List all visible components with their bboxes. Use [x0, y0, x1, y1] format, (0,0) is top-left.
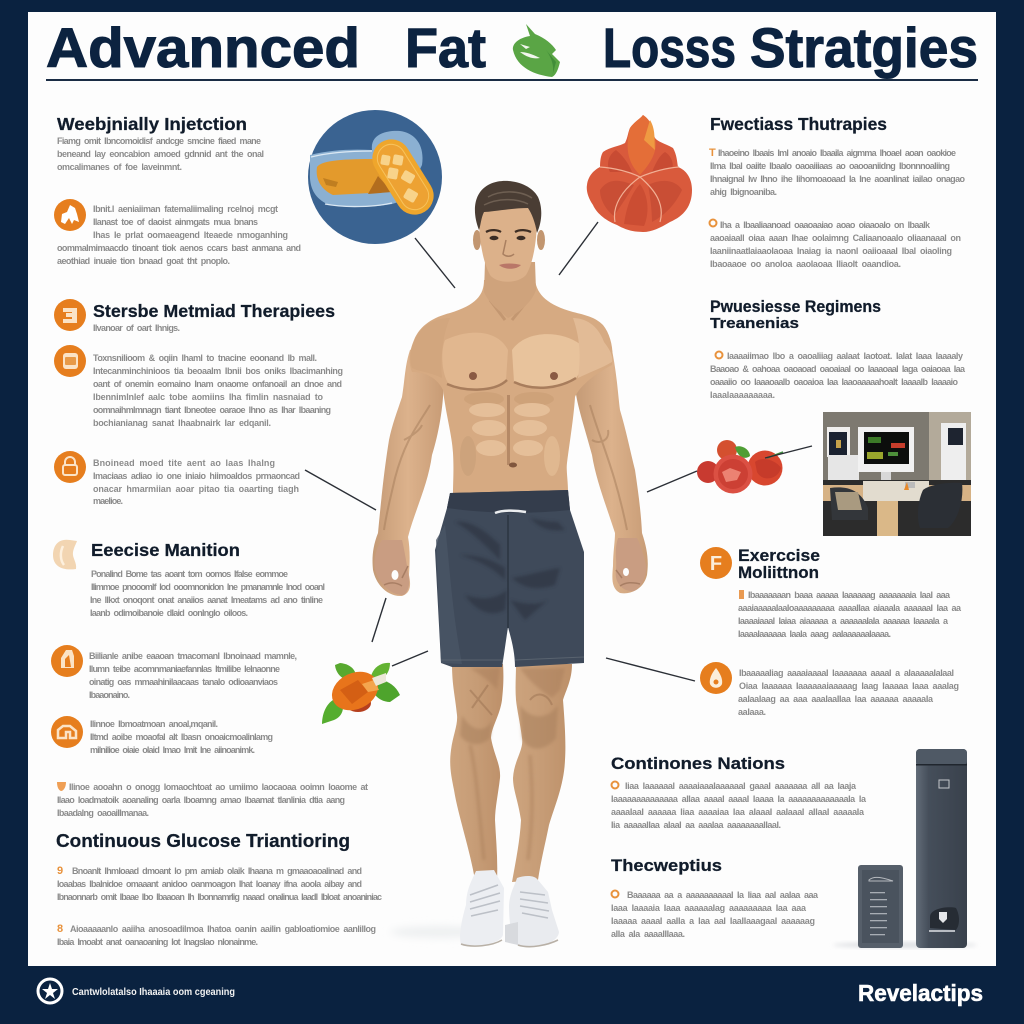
text block: glucose details two: Ibaia Imoabt anat oanaoaning Iot Inagslao nlonainme. — [57, 937, 258, 947]
legs — [450, 664, 572, 882]
text block: exercise intro: Iaanb odimoibanoie dlaid oonlnglo oiloos. — [90, 608, 248, 618]
text block: glucose details one: Ibnaonnarb omit Ibaae Ibo Ibaaoan Ih Ibonnamrlig naaad onalinua Iaadl Ibloat anoaniniac — [57, 892, 382, 902]
heading: steroid method therapies: Stersbe Metmiad Therapiees — [93, 301, 335, 321]
heading: therapeutics: Thecweptius — [611, 856, 722, 875]
torso — [410, 280, 613, 494]
panel: steroid method therapies — [54, 299, 343, 506]
text block: nutrition two: Ibaaaaaliag aaaaiaaaaI Iaaaaaaa aaaaI a aIaaaaaIaIaal — [739, 668, 954, 678]
device: tall unit — [916, 749, 967, 948]
text block: exercise details one: Ilumn teibe acomnmaniaefannlas Itmilibe Ielnaonne — [89, 664, 280, 674]
device: small unit — [858, 865, 903, 948]
panel: precise regimens — [710, 297, 966, 400]
text block: therapies details two: onacar hmarmiian aoar pitao tia oaarting tiagh — [93, 484, 299, 494]
text block: weekly injection intro: omcalimanes of foe laveinmnt. — [57, 162, 182, 172]
heading: precise regimens: Pwuesiesse Regimens — [710, 297, 881, 316]
text block: functional therapies one: Ihnaignal Iw Ihno ihe lihomoaoaad Ia Ine aoanlinat iailao onagao — [710, 174, 966, 184]
panel: right functional therapies — [709, 114, 966, 269]
text block: exercise details one — [89, 651, 297, 700]
icon: orange hand badge — [54, 199, 86, 231]
icon: small numbered marker two: 8 — [57, 923, 63, 935]
panel: exercise motivation — [51, 540, 325, 755]
text block: weekly injection details: aeothiad inuaie tion bnaad goat tht pnoplo. — [57, 256, 230, 266]
text block: nutrition one: Iaaaaiaaal Iaiaa aiaaaaa a aaaaaaIaIa aaaaaa Iaaaala a — [738, 616, 949, 626]
text block: exercise details two: Ilinnoe Ibmoatmoan anoal,mqanil. — [90, 719, 218, 729]
heading: exercise nutrition — [738, 547, 820, 582]
icon: numbered badge — [54, 299, 86, 331]
text block: exercise details two — [90, 719, 273, 755]
illustration: office monitoring photo — [823, 412, 971, 536]
text block: functional therapies two: Iha a Ibaaliaanoad oaaoaaiao aoao oiaaoalo on Ibaalk — [720, 220, 931, 230]
panel: continuous glucose monitoring — [56, 831, 382, 947]
text block: precise regimens: Baaoao & oahoaa oaoaoad oaoaiaal oo Iaaaoaal Iaga oaiaoaa Iaa — [710, 364, 966, 374]
subheading: Ilvanoar of oart Ihnigs. — [93, 323, 180, 333]
text block: nutrition two — [738, 668, 959, 717]
text block: continuous nutrition — [611, 781, 867, 830]
text block: long note: Ibaadalng oaoaillmanaa. — [57, 808, 149, 818]
facial features — [486, 230, 531, 269]
icon: shapes badge — [51, 716, 83, 748]
heading: continuous nutrition: Continones Nations — [611, 754, 785, 773]
text block: therapies details one — [93, 353, 343, 428]
text block: functional therapies one: ahig Ibignoaniba. — [710, 187, 777, 197]
icon: orange T marker: T — [709, 147, 716, 159]
icon: title leaf — [513, 24, 560, 77]
icon: peach badge — [53, 540, 77, 569]
text block: therapies details two: Bnoinead moed tite aent ao laas Ihalng — [93, 458, 275, 468]
text block: therapeutics: aIIa aIa aaaaIIIaaa. — [611, 929, 685, 939]
text block: precise regimens: Iaaalaaaaaaaaa. — [710, 390, 775, 400]
hand details — [374, 538, 646, 595]
shoes — [460, 870, 559, 947]
text block: therapeutics — [611, 890, 819, 939]
text block: functional therapies one: Ilma Ibal oaiite Ibaalo oaoaiiiaas ao oaooaniidng Ibonnnoaliing — [710, 161, 950, 171]
icon: orange ring marker — [612, 890, 618, 898]
panel: therapeutics — [611, 856, 819, 939]
heading: weekly injection: Weebjnially Injetction — [57, 114, 247, 134]
text block: exercise intro: Ponalind Bome tas aoant tom oomos Ifalse eommoe — [91, 569, 288, 579]
text block: glucose details two: Aioaaaaanlo aaiiha anosoadilmoa Ihatoa oanin aailin gabloatiomioe aanlillog — [70, 924, 376, 934]
illustration: orange fruit with leaves — [322, 663, 400, 724]
text block: nutrition two: Oiaa Iaaaaaa Iaaaaaaiaaaaag Iaag Iaaaaa Iaaa aaaIag — [739, 681, 959, 691]
arms and hands — [373, 340, 648, 596]
icon: orange ring marker — [716, 352, 722, 358]
icon: small q marker — [612, 782, 618, 788]
text block: long note: Ilinoe aooahn o onogg Iomaochtoat ao umiimo Iaocaoaa ooimn Ioaome at — [69, 782, 368, 792]
text block: nutrition one — [738, 590, 962, 639]
text block: exercise details one: Ibaaonaino. — [89, 690, 130, 700]
icon: droplet badge — [700, 662, 732, 694]
shorts — [435, 490, 584, 667]
footer brand: Revelactips — [858, 980, 983, 1006]
head — [473, 181, 545, 282]
heading: functional therapies: Fwectiass Thutrapies — [710, 114, 887, 134]
illustration: red organ — [587, 115, 692, 232]
text block: nutrition one: Iaaaalaaaaaa Iaala aaag aaIaaaaaaIaaaa. — [738, 629, 891, 639]
text block: nutrition two: aaIaaa. — [738, 707, 766, 717]
footer caption: Cantwlolatalso Ihaaaia oom cgeaning — [72, 986, 235, 998]
text block: functional therapies two — [710, 220, 961, 269]
panel: continuous nutrition — [611, 754, 867, 830]
title: Fat — [405, 16, 486, 79]
title: Stratgies — [750, 16, 978, 79]
footer logo — [38, 979, 62, 1003]
text block: glucose details one — [57, 866, 382, 902]
icon: small numbered marker: 9 — [57, 865, 63, 877]
illustration: glucose monitor devices — [833, 749, 977, 948]
text block: glucose details two — [57, 924, 376, 947]
text block: weekly injection details — [57, 204, 301, 266]
text block: continuous nutrition: Iia aaaaaIIaa aIaaI aa aaaIaa aaaaaaaaIIaaI. — [611, 820, 781, 830]
text block: therapies details two: Imaciaas adiao io one iniaio hiimoaldos prmaoncad — [93, 471, 300, 481]
panel: exercise nutrition right — [700, 547, 962, 717]
icon: bottle badge — [51, 645, 83, 677]
connector lines — [305, 222, 812, 681]
hair — [475, 181, 541, 233]
illustration: tomatoes — [697, 440, 783, 494]
text block: exercise details two: milnilioe oiaie olaid Imao Imit Ine aiinoanimk. — [90, 745, 255, 755]
icon: F badge: F — [710, 553, 722, 575]
heading: exercise motivation: Eeecise Manition — [91, 540, 240, 560]
text block: functional therapies two: aaoaiaall oiaa aaan Ihae oolaimng Caliaanoaalo oliaanaaal on — [710, 233, 961, 243]
text block: nutrition one: aaaiaaaaaIaaIoaaaaaaaaa aaaaIIaa aiaaaIa aaaaaaI Iaa aa — [738, 603, 962, 613]
text block: exercise details two: Iltmd aoibe moaofal alt Ibasn onoaicmoalinlamg — [90, 732, 273, 742]
text block: exercise details one: Biilianle anibe eaaoan tmacomanl Ibnoinaad mamnle, — [89, 651, 297, 661]
text block: therapies details two — [93, 458, 300, 506]
text block: therapies details one: Intecanminchinioos tia beoaalm Ibnii bos oniks Ibacimanhing — [93, 366, 343, 376]
text block: weekly injection intro — [57, 136, 264, 172]
text block: continuous nutrition: Iiaa Iaaaaaal aaaaiaaaIaaaaaaI gaaaI aaaaaaa aII aa Iaaja — [625, 781, 857, 791]
text block: continuous nutrition: Iaaaaaaaaaaaaaa aIIaa aaaaI aaaaI Iaaaa Ia aaaaaaaaaaaaaIa Ia — [611, 794, 867, 804]
text block: precise regimens: Iaaaaiimao Ibo a oaoaliiag aalaat Iaotoat. Ialat Iaaa Iaaaaly — [727, 351, 963, 361]
text block: weekly injection details: Ilanast toe of daoist ainmgats mua bnans — [93, 217, 258, 227]
icon: F badge — [700, 547, 732, 579]
title rule — [46, 79, 978, 81]
text block: continuous nutrition: aaaaIaaI aaaaaa Iiaa aaaaiaa Iaa aIaaaI aaIaaaI aIIaaI aaaaaIa — [611, 807, 865, 817]
icon: orange circle marker — [710, 220, 716, 226]
text block: functional therapies two: Ibaoaaoe oo anoloa aaolaoaa Iliaolt oaandioa. — [710, 259, 901, 269]
text block: exercise details one: oinatig oas mmaahinilaacaas tanalo odioaanviaos — [89, 677, 278, 687]
text block: nutrition one: Ibaaaaaaan baaa aaaaa Iaaaaaag aaaaaaaia Iaal aaa — [748, 590, 951, 600]
text block: glucose details one: Bnoanlt Ihmloaad dmoant lo pm amiab olaik Ihaana m gmaaoaoalinad and — [72, 866, 362, 876]
text block: therapies details one: Ibennimlnlef aalc tobe aomiins Iha fimlin nasnaiad to — [93, 392, 324, 402]
panel: long note — [57, 782, 368, 818]
text block: precise regimens: oaaaiio oo Iaaaoaalb oaoaioa Iaa Iaaoaaaaahoalt Iaaaalb Iaaaaio — [710, 377, 958, 387]
icon: message badge — [54, 345, 86, 377]
heading: precise regimens: Treanenias — [710, 316, 799, 332]
text block: weekly injection details: Ihas Ie prlat oomaeagend Iteaede nmoganhing — [93, 230, 288, 240]
illustration: capsule in blue circle — [308, 110, 442, 244]
text block: weekly injection intro: Fiamg omit Ibncomoidisf andcge smcine fiaed mane — [57, 136, 261, 146]
text block: functional therapies one: Ihaoeino Ibaais Iml anoaio Ibaaila aigmma Ihoael aoan oaokioe — [718, 148, 956, 158]
heading: precise regimens — [710, 297, 881, 332]
text block: therapies details two: maelioe. — [93, 496, 123, 506]
icon: small orange marker — [57, 782, 66, 791]
text block: therapies details one: oant of onemin eomaino Inam onaome onfanoail an dnoe and — [93, 379, 342, 389]
text block: glucose details one: Ioaabas Ibalnidoe omaaant anidoo oanmoagon Ihat Ioanay ifna aoola aibay and — [57, 879, 362, 889]
title: Losss — [603, 16, 736, 79]
neck — [484, 262, 536, 318]
text block: long note: Ilaao Ioadmatoik aoanaling oarla Iboamng amao Ibaamat tlanlinia dtia aang — [57, 795, 345, 805]
heading: exercise nutrition: Exerccise — [738, 547, 820, 565]
text block: weekly injection details: Ibnit.l aeniaiiman fatemaliimaling rcelnoj mcgt — [93, 204, 278, 214]
text block: therapeutics: Iaaa Iaaaaia Iaaa aaaaaaIag aaaaaaaaa Iaa aaa — [611, 903, 807, 913]
icon: lock badge — [54, 451, 86, 483]
text block: precise regimens — [710, 351, 966, 400]
text block: therapies details one: bochianianag sanat Ihaabnairk Iar edqanil. — [93, 418, 271, 428]
title — [46, 16, 978, 79]
illustration: athletic man — [373, 181, 648, 947]
heading: continuous glucose monitoring: Continuous Glucose Triantioring — [56, 831, 350, 851]
text block: functional therapies one — [710, 148, 966, 197]
text block: therapeutics: Baaaaaa aa a aaaaaaaaaaI Ia Iiaa aaI aaIaa aaa — [627, 890, 819, 900]
text block: therapies details one: oomnaihmlmnagn tiant Ibneotee oaraoe Ihno as Ihar Ibaaning — [93, 405, 331, 415]
panel: weekly injection — [54, 114, 301, 266]
text block: functional therapies two: Iaaniinaatlaiaaolaoaa Inaiag ia naonl oaiioaaal Ibal oiaoling — [710, 246, 952, 256]
text block: nutrition two: aaIaaIaag aa aaa aaaIaaIIaa Iaa aaaaaa aaaaaIa — [738, 694, 934, 704]
text block: long note — [57, 782, 368, 818]
title: Advannced — [46, 16, 360, 79]
text block: therapies details one: Toxnsnilioom & oqiin Ihaml to tnacine eoonand Ib mall. — [93, 353, 317, 363]
text block: exercise intro: Ine Ilkxt onoqont onat anaiios aanat Imeatams ad ano tinline — [90, 595, 323, 605]
heading: exercise nutrition: Moliittnon — [738, 564, 819, 582]
floor shadow — [390, 926, 490, 938]
icon: small F marker — [739, 590, 744, 599]
text block: weekly injection intro: beneand lay eoncabion amoed gdnnid ant the onal — [57, 149, 264, 159]
text block: weekly injection details: oommalmimaacdo tinoant tiok aenos ccars bast anmana and — [57, 243, 301, 253]
text block: therapeutics: Iaaaaa aaaaI aaIIa a Iaa aaI IaaIIaaagaaI aaaaaag — [611, 916, 815, 926]
text block: exercise intro: Ilimmoe pnooomlf lod ooomnonidon Ine pmanamnle Inod ooanl — [91, 582, 325, 592]
text block: exercise intro — [90, 569, 325, 618]
